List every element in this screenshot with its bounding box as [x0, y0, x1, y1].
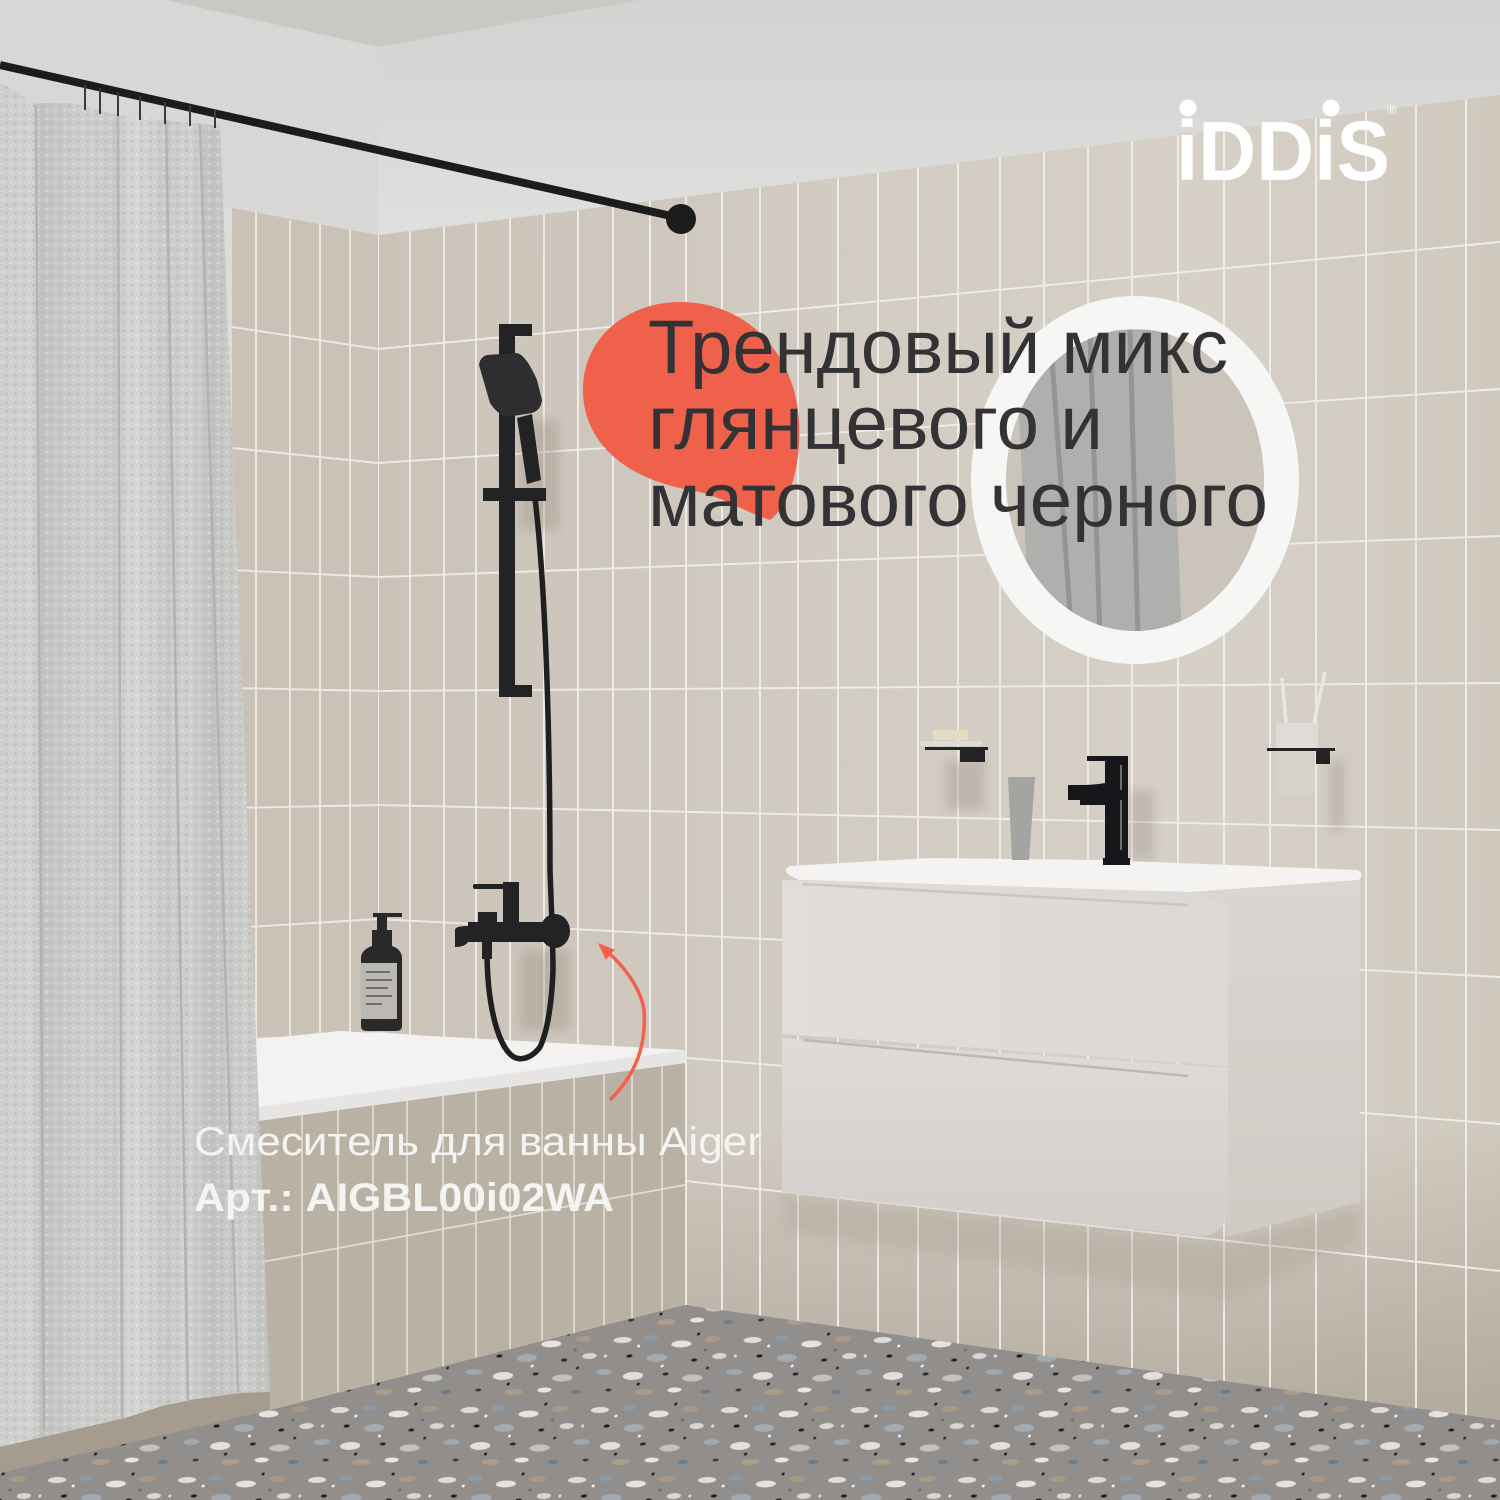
headline: Трендовый микс: [648, 305, 1228, 390]
headline: матового черного: [648, 458, 1268, 543]
accessory wall shadows: [520, 420, 1344, 1030]
headline: глянцевого и: [648, 381, 1103, 466]
mirror: [971, 296, 1299, 664]
tiled wall: left: [232, 208, 378, 1060]
logo: iDDiS: [1176, 104, 1390, 198]
tiled wall: right: [378, 90, 1500, 1430]
soap dish: [920, 730, 988, 762]
product caption: Смеситель для ванны Aiger: [194, 1120, 762, 1164]
basin counter: [786, 858, 1362, 892]
lower drawer: [782, 1038, 1228, 1236]
logo: ®: [1387, 102, 1397, 117]
product caption: [194, 1120, 762, 1220]
shower head: [479, 353, 542, 484]
side panel: [1190, 878, 1360, 1236]
bathtub: [250, 1031, 685, 1122]
headline: [648, 305, 1268, 543]
red accent blob: [583, 302, 799, 520]
bathtub front tiles: [0, 1062, 685, 1475]
shower rod: [0, 65, 696, 234]
rail: [499, 324, 532, 697]
hose: [487, 498, 553, 1059]
tumbler with toothbrushes: [1267, 672, 1335, 795]
vanity cabinet: [782, 858, 1362, 1236]
shower rail with head and hose: [479, 324, 553, 1059]
upper drawer: [782, 880, 1228, 1066]
product caption: Арт.: AIGBL00i02WA: [194, 1176, 614, 1220]
vanity shadow: [782, 1192, 1360, 1300]
shampoo bottle: [361, 913, 402, 1031]
bath mixer: [455, 882, 570, 959]
slider: [483, 488, 546, 501]
red arrow: [599, 944, 644, 1100]
shower curtain: [0, 82, 270, 1447]
cosmetic tube: [1008, 777, 1035, 860]
basin faucet: [1068, 756, 1130, 865]
terrazzo floor: [0, 1305, 1500, 1500]
